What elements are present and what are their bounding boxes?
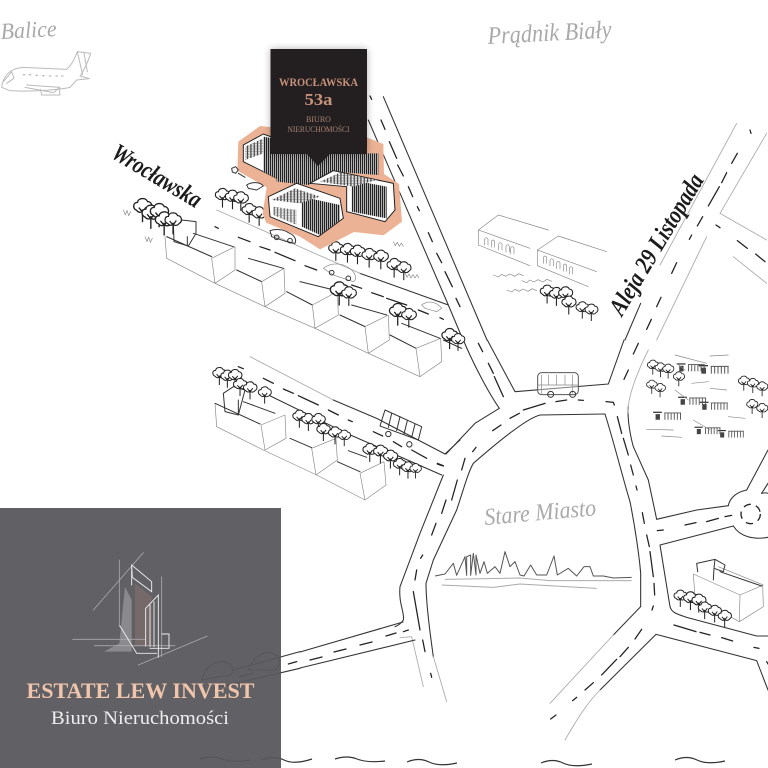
highlighted complex: orange blob with apartment blocks bbox=[232, 126, 402, 249]
roundabout bbox=[728, 490, 768, 538]
wave marks at the bottom (river) bbox=[200, 757, 725, 766]
icon: airplane near Balice bbox=[2, 52, 91, 95]
building by the bottom right road bbox=[674, 559, 763, 627]
street label: Aleja 29 Listopada: Aleja 29 Listopada bbox=[603, 169, 710, 322]
road: lower Wrocławska segment bbox=[238, 357, 460, 475]
road dashes: Wrocławska bbox=[215, 96, 460, 319]
road network: Wrocławska and branch roads bbox=[167, 96, 487, 348]
trees along Wrocławska bbox=[123, 188, 465, 351]
icon: tram on lower road bbox=[380, 410, 422, 447]
apartment block front bbox=[268, 183, 343, 237]
apartment block right bbox=[310, 171, 395, 222]
cars on Wrocławska bbox=[270, 230, 442, 312]
label: Stare Miasto: Stare Miasto bbox=[483, 495, 597, 531]
location marker callout: Wrocławska 53a: WROCŁAWSKA bbox=[279, 77, 359, 89]
tagline: Biuro Nieruchomości bbox=[51, 708, 229, 729]
location marker callout: Wrocławska 53a: BIURO bbox=[306, 115, 331, 124]
cars near the logo panel bbox=[202, 652, 300, 688]
row of buildings along Wrocławska bbox=[165, 220, 442, 377]
road dashes west of the ring bbox=[300, 622, 415, 668]
warehouse buildings sketch bbox=[478, 215, 607, 321]
logo: building line drawing bbox=[73, 553, 207, 665]
lower row of buildings bbox=[215, 387, 386, 500]
road: Aleja 29 Listopada edges and dashes bbox=[625, 123, 767, 340]
panel: company logo bbox=[0, 508, 281, 768]
road: city ring and junctions bbox=[395, 340, 768, 740]
label: Balice: Balice bbox=[0, 16, 57, 44]
small car and shrubs beside complex bbox=[232, 167, 263, 190]
road edges: upper roads bbox=[167, 97, 487, 348]
apartment block rear centre bbox=[277, 153, 378, 185]
location marker callout: Wrocławska 53a: NIERUCHOMOŚCI bbox=[288, 124, 350, 134]
trees on lower road bbox=[213, 367, 421, 479]
icon: bus at ring road bbox=[538, 373, 578, 397]
company name: ESTATE LEW INVEST bbox=[26, 678, 255, 703]
small houses cluster on the right bbox=[647, 355, 768, 438]
skyline of the old town bbox=[435, 552, 632, 588]
label: Prądnik Biały: Prądnik Biały bbox=[486, 16, 613, 50]
location marker callout: Wrocławska 53a: 53a bbox=[304, 90, 333, 109]
location marker callout: Wrocławska 53a bbox=[270, 49, 367, 166]
street label: Wrocławska: Wrocławska bbox=[107, 139, 207, 214]
apartment block left bbox=[243, 134, 280, 180]
